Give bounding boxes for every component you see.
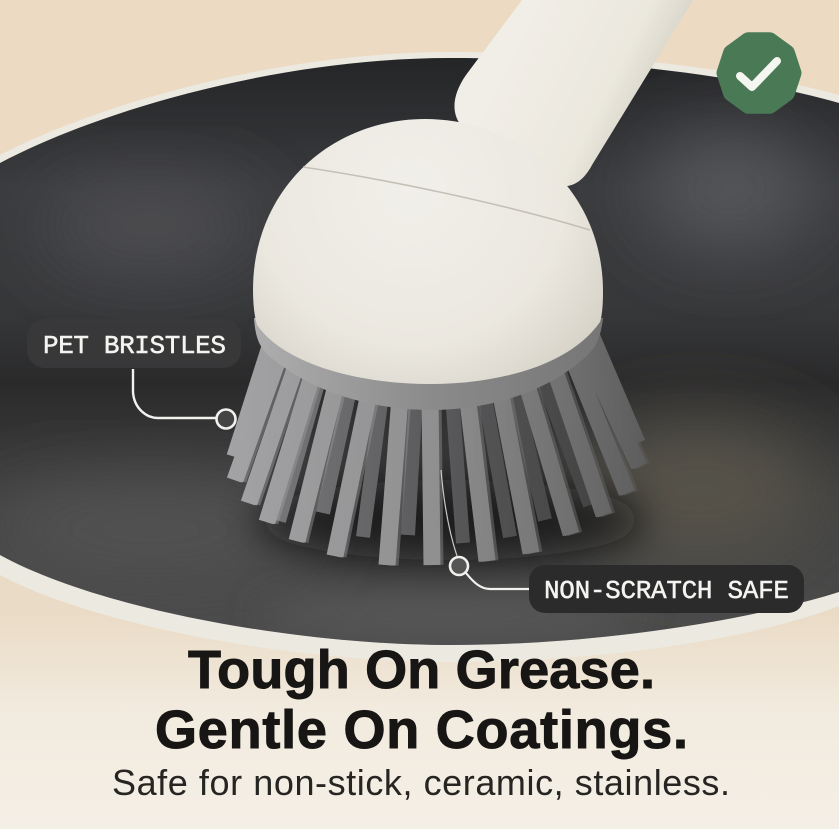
- dome head: [253, 119, 603, 384]
- icon: scalloped seal: [724, 40, 794, 106]
- collar: [254, 318, 603, 410]
- icon: check mark: [740, 61, 777, 87]
- pan rim: [0, 52, 839, 662]
- subheading: Safe for non-stick, ceramic, stainless.: [112, 762, 730, 803]
- bristles: [232, 325, 643, 565]
- leader line: [466, 573, 530, 589]
- stray bristle hair: [441, 470, 457, 556]
- leader line: [133, 369, 217, 418]
- dome seam: [303, 167, 590, 230]
- marker ring: [216, 410, 236, 428]
- badge: green check: [724, 40, 794, 106]
- marker ring: [450, 557, 468, 575]
- heading: [155, 640, 688, 760]
- label pill: [529, 565, 804, 613]
- pan: [0, 52, 839, 662]
- callout: non-scratch safe: [450, 557, 804, 613]
- heading line 1: Tough On Grease.: [188, 640, 655, 700]
- handle: [454, 0, 693, 186]
- label pill: [27, 319, 241, 368]
- pan surface: [0, 58, 839, 648]
- label text: PET BRISTLES: [43, 331, 226, 361]
- label text: NON-SCRATCH SAFE: [544, 576, 789, 606]
- callout: PET bristles: [27, 319, 241, 428]
- heading line 2: Gentle On Coatings.: [155, 700, 688, 760]
- brush: [232, 0, 693, 565]
